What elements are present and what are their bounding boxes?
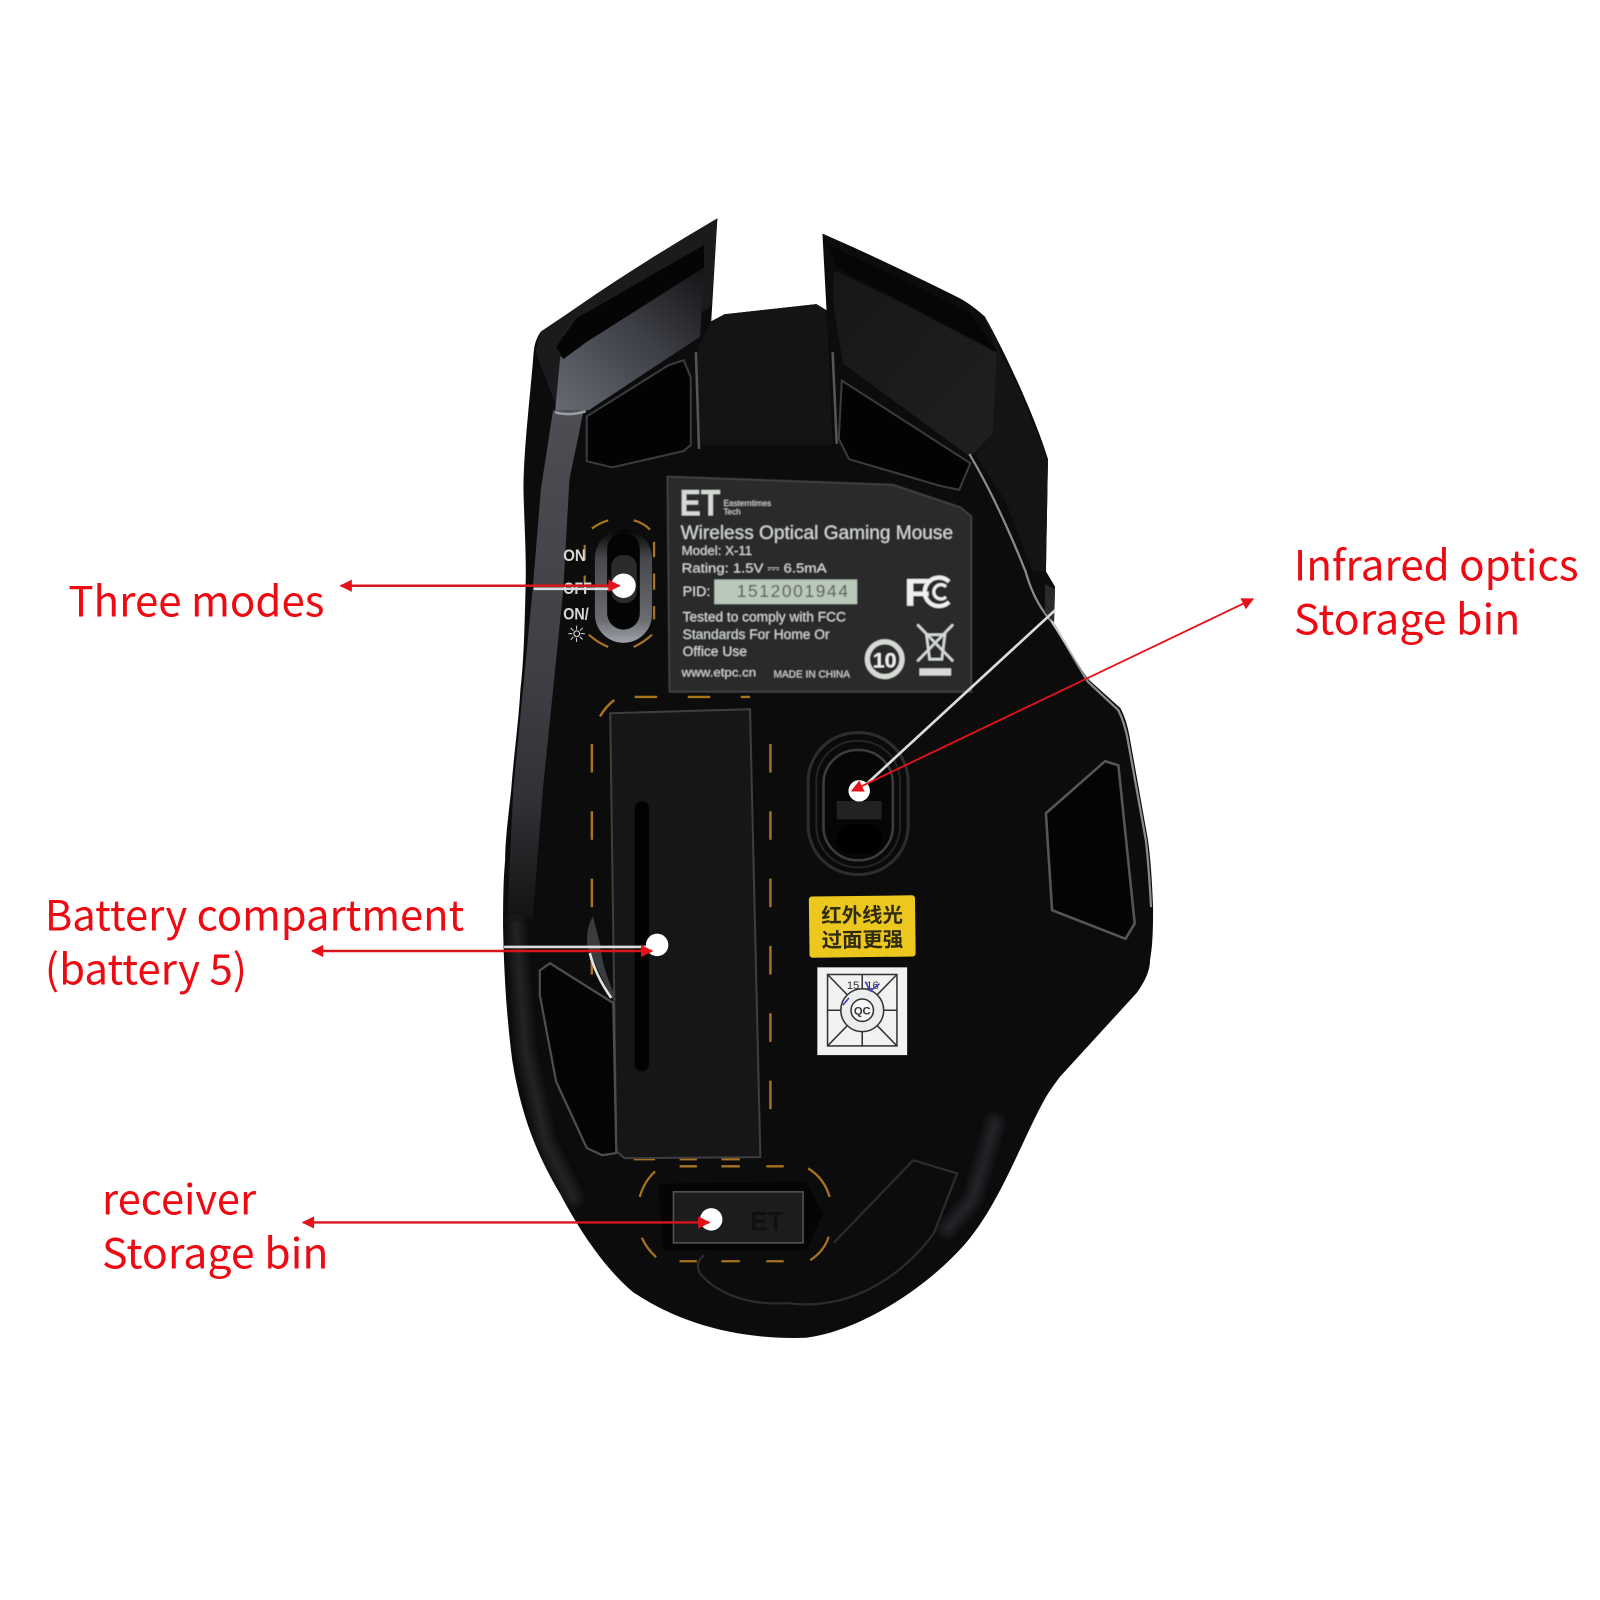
side nub (1045, 584, 1055, 622)
brand logo: Easterntimes (723, 499, 771, 508)
model line: Model: X-11 (682, 543, 752, 558)
double arrow (312, 950, 652, 952)
diagram canvas (48, 218, 1577, 1338)
FCC statement: Tested to comply with FCC (683, 609, 846, 625)
website: www.etpc.cn (681, 666, 756, 680)
centre rails (696, 352, 837, 449)
callout: battery compartment (45, 883, 668, 998)
receiver latch (673, 1192, 803, 1243)
device label (667, 477, 971, 692)
receiver latch: ET (750, 1207, 784, 1237)
right button black strip (829, 245, 998, 353)
switch slider (611, 555, 637, 603)
mode switch (563, 520, 654, 648)
label text: (battery 5) (45, 937, 247, 998)
left button black slot (556, 245, 704, 359)
yellow sticker: 过面更强 (821, 922, 903, 953)
mode labels: ON (563, 547, 586, 565)
mode labels (563, 547, 592, 648)
label text: Infrared optics (1294, 533, 1579, 594)
QC sticker: QC (854, 1005, 871, 1017)
pointer dot (848, 780, 870, 802)
pointer dot (611, 573, 636, 598)
callout: infrared optics storage bin (848, 533, 1579, 802)
double arrow (303, 1221, 709, 1224)
ten year icon: 10 (873, 648, 897, 672)
right button panel (834, 270, 997, 457)
pointer dot (646, 934, 668, 956)
battery dashes (592, 697, 784, 1166)
FCC statement (683, 609, 846, 660)
mode labels: ☼ (566, 622, 587, 648)
mode labels: ON/ (563, 605, 589, 623)
label plate (667, 477, 971, 692)
callout: three modes (68, 568, 636, 629)
battery cover (610, 709, 760, 1158)
PID caption: PID: (683, 584, 710, 600)
FCC statement: Standards For Home Or (683, 627, 830, 643)
label text: Storage bin (1294, 587, 1520, 648)
QC sticker (817, 967, 907, 1055)
left button glossy panel (555, 267, 704, 411)
recycling icon (917, 624, 953, 676)
label text (1294, 533, 1579, 648)
rating line: Rating: 1.5V ⎓ 6.5mA (682, 560, 827, 575)
ten year icon (867, 642, 902, 677)
right side cheek (974, 316, 1048, 571)
glide foot top right (839, 381, 970, 490)
lower left edge sheen (515, 918, 577, 1204)
receiver recess (658, 1182, 823, 1250)
mode labels: OFF (563, 580, 592, 598)
right thumb glide foot (1046, 761, 1135, 939)
QC sticker: 15 (847, 980, 859, 992)
battery slot (635, 801, 649, 1071)
label title: Wireless Optical Gaming Mouse (681, 522, 953, 544)
left button dark top (536, 218, 717, 406)
yellow sticker (809, 895, 916, 958)
glide foot top left (587, 360, 691, 467)
lower left glide foot (540, 963, 616, 1155)
switch outer capsule (595, 530, 652, 643)
label text (102, 1166, 329, 1281)
PID box (714, 580, 857, 604)
FC mark: F (904, 572, 931, 615)
white pointer lines (504, 589, 1055, 947)
label text (45, 883, 465, 998)
double arrow (852, 599, 1253, 791)
right contour line (969, 454, 1151, 907)
battery side glint (587, 916, 616, 1000)
crescent foot outline (698, 1160, 957, 1304)
double arrow (341, 585, 619, 587)
switch inner capsule (607, 533, 640, 630)
strip corner highlight (555, 411, 586, 414)
PID box: 1512001944 (737, 581, 848, 601)
brand logo (680, 482, 771, 523)
FC mark (904, 572, 949, 615)
brand logo: ET (680, 482, 721, 523)
QC sticker: 16 (866, 980, 879, 992)
pointer dot (700, 1208, 722, 1231)
receiver dashes (640, 1168, 830, 1261)
brand logo: Tech (723, 507, 741, 516)
right edge sheen (943, 1116, 997, 1234)
made in china: MADE IN CHINA (773, 670, 851, 681)
label text: receiver (102, 1166, 257, 1227)
label text: Three modes (68, 568, 324, 629)
left side gray strip (507, 410, 584, 918)
switch dashes (585, 520, 654, 647)
mouse body silhouette (503, 218, 1153, 1338)
callout: receiver storage bin (102, 1166, 722, 1281)
FCC statement: Office Use (683, 644, 747, 660)
sensor well (808, 733, 908, 874)
yellow sticker: 红外线光 (821, 898, 903, 929)
label text: Battery compartment (45, 883, 465, 944)
top centre block (698, 304, 833, 445)
label text: Storage bin (102, 1220, 329, 1281)
mouse underside (503, 218, 1153, 1338)
